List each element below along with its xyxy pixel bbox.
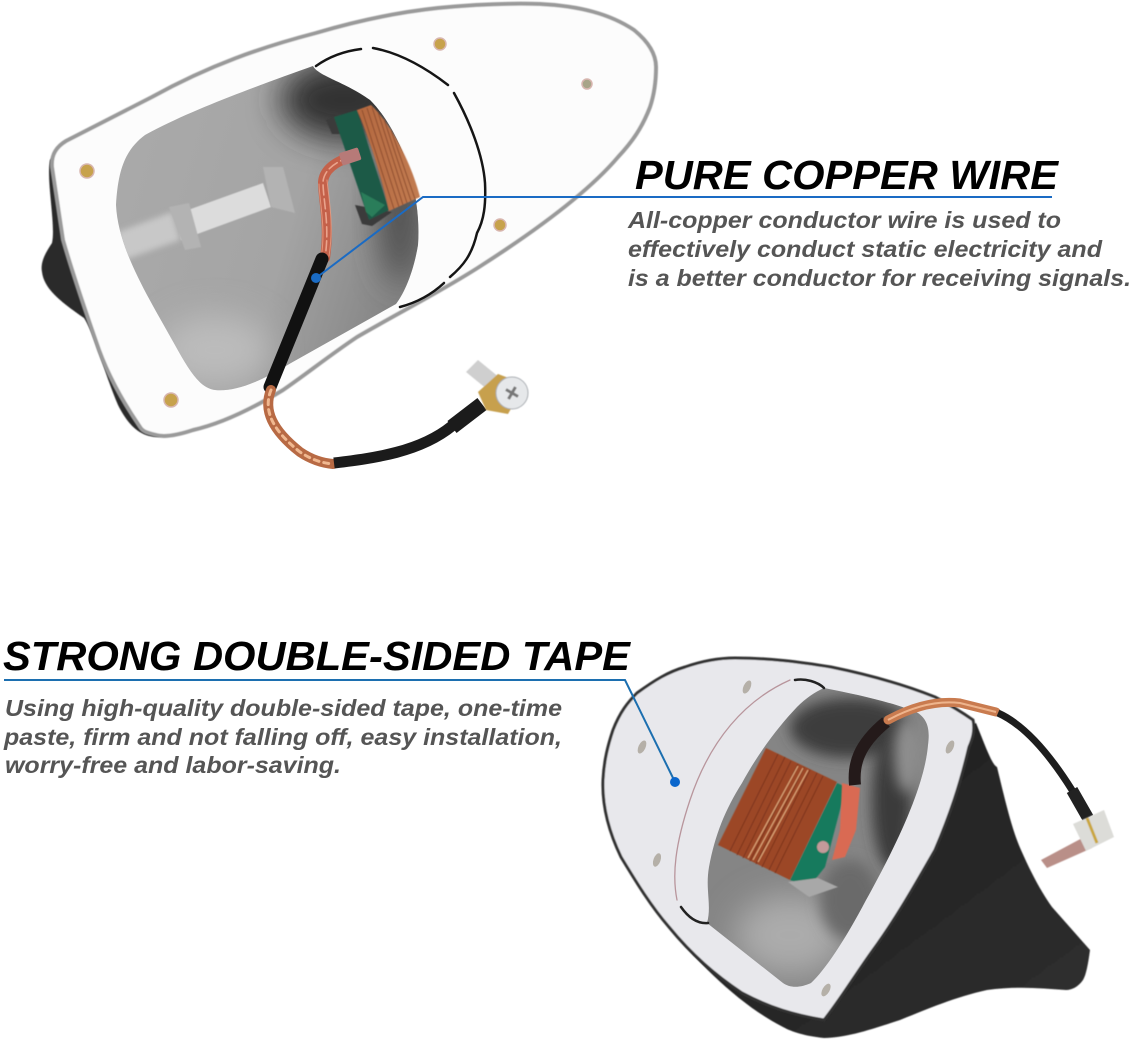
heading: strong double-sided tape: STRONG DOUBLE-SIDED TAPE <box>3 633 632 679</box>
grey interior opening <box>700 680 935 990</box>
text block: pure copper wire description <box>627 207 1131 291</box>
text block: double-sided tape description: Using high-quality double-sided tape, one-time <box>5 695 562 721</box>
callout: pure copper wire leader line <box>311 197 1052 283</box>
text block: pure copper wire description: is a better conductor for receiving signals. <box>628 265 1131 291</box>
text block: double-sided tape description: worry-free and labor-saving. <box>5 752 341 778</box>
crescent edge marks <box>675 679 824 923</box>
circuit board with copper traces <box>326 105 420 226</box>
black antenna body <box>669 723 1090 1038</box>
white mounting plate <box>52 4 656 436</box>
moulded bar inside the shell <box>118 167 295 262</box>
text block: pure copper wire description: All-copper conductor wire is used to <box>627 207 1061 233</box>
product photo: antenna, wiring side up <box>42 4 656 464</box>
mounting screws <box>80 38 592 407</box>
copper circuit board <box>718 748 846 897</box>
product photo: antenna, adhesive tape side <box>603 658 1114 1038</box>
wire: fan joint, black sleeve, copper and cable <box>832 702 1088 860</box>
copper wire, solder joint and black sleeve <box>268 147 482 464</box>
crescent slot marks <box>316 48 485 307</box>
callout: double-sided tape leader line <box>4 680 680 787</box>
white tape plate <box>603 658 974 1020</box>
text block: pure copper wire description: effectively conduct static electricity and <box>628 236 1103 262</box>
tape plate holes <box>636 679 956 998</box>
terminal screw connector <box>466 360 528 414</box>
text block: double-sided tape description <box>3 695 562 778</box>
grey interior opening <box>116 66 418 390</box>
text block: double-sided tape description: paste, firm and not falling off, easy installation, <box>3 724 562 750</box>
heading: pure copper wire: PURE COPPER WIRE <box>635 152 1060 198</box>
connector and stud <box>1041 810 1114 868</box>
black antenna shell behind the plate <box>42 150 180 437</box>
